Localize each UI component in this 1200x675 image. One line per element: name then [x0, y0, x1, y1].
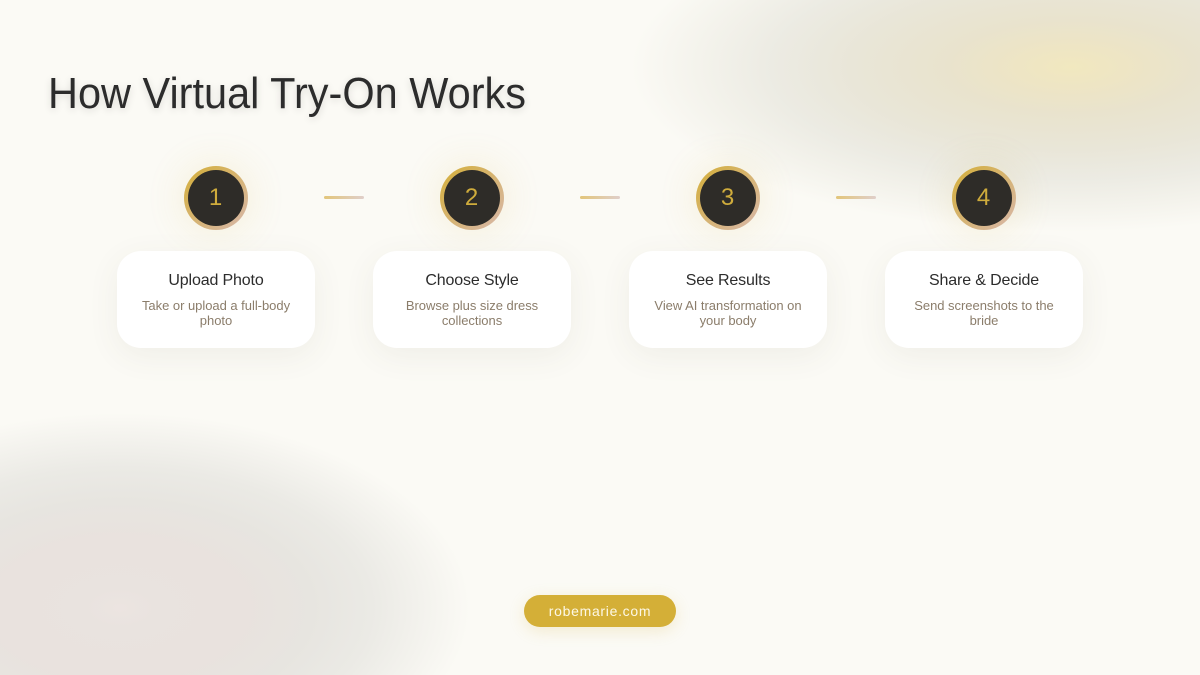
card: choose style: Browse plus size dress — [406, 298, 538, 313]
step 2 number: 2 — [465, 184, 478, 211]
card: choose style: Choose Style — [425, 272, 519, 289]
connector 1 to 2 — [324, 196, 364, 199]
card: see results: your body — [700, 313, 756, 328]
card: share and decide: Share & Decide — [929, 272, 1039, 289]
connector 2 to 3 — [580, 196, 620, 199]
card: see results: See Results — [686, 272, 770, 289]
step 3 number: 3 — [721, 184, 734, 211]
card: upload photo: photo — [200, 313, 232, 328]
card: see results — [629, 251, 827, 348]
step 1 number: 1 — [209, 184, 222, 211]
card: share and decide — [885, 251, 1083, 348]
card: share and decide: Send screenshots to the — [914, 298, 1054, 313]
card: see results: View AI transformation on — [654, 298, 802, 313]
step 4 number — [952, 166, 1016, 230]
connector 3 to 4 — [836, 196, 876, 199]
step 1 number — [184, 166, 248, 230]
card: choose style: collections — [442, 313, 502, 328]
card: upload photo: Upload Photo — [168, 272, 264, 289]
title: How Virtual Try-On Works — [48, 69, 526, 118]
card: upload photo: Take or upload a full-body — [142, 298, 290, 313]
website badge — [524, 595, 676, 627]
step 4 number: 4 — [977, 184, 990, 211]
card: share and decide: bride — [970, 313, 998, 328]
card: choose style — [373, 251, 571, 348]
card: upload photo — [117, 251, 315, 348]
website badge: robemarie.com — [549, 603, 651, 619]
step 3 number — [696, 166, 760, 230]
step 2 number — [440, 166, 504, 230]
